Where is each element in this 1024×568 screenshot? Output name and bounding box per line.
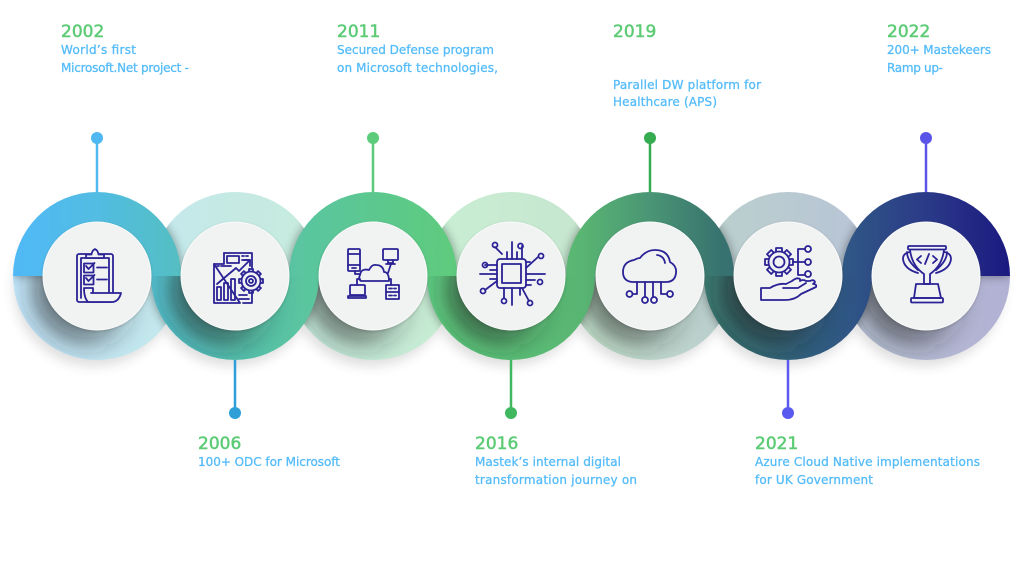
text: 2011: on Microsoft technologies, <box>337 61 498 75</box>
disc shadows on dark lower rings <box>154 276 832 360</box>
text: 2021 <box>755 434 980 487</box>
text: 2016: transformation journey on <box>475 473 637 487</box>
disc shadows on light lower rings <box>15 276 975 360</box>
text: 2002: Microsoft.Net project - <box>61 61 189 75</box>
icon: clipboard checklist <box>77 249 121 302</box>
icon: cloud with nodes <box>623 250 676 303</box>
connector: 2021 <box>782 360 794 419</box>
text: 2011 <box>337 22 498 75</box>
text: 2022 <box>887 22 991 75</box>
connector: 2022 <box>920 132 932 192</box>
icon: hand holding gear <box>761 246 816 300</box>
text: 2006 <box>198 434 340 469</box>
text: 2002: 2002 <box>61 22 104 42</box>
connector: 2002 <box>91 132 103 192</box>
text: 2021: for UK Government <box>755 473 873 487</box>
text: 2002: World’s first <box>61 43 136 57</box>
connector: 2016 <box>505 360 517 419</box>
text: 2016: 2016 <box>475 434 518 454</box>
text: 2019: Healthcare (APS) <box>613 95 717 109</box>
connector: 2006 <box>229 360 241 419</box>
text: 2006: 100+ ODC for Microsoft <box>198 455 340 469</box>
icon: code trophy <box>903 246 951 302</box>
serpentine dark half rings <box>13 192 1010 360</box>
text: 2019: 2019 <box>613 22 656 42</box>
text: 2022: 2022 <box>887 22 930 42</box>
text: 2002 <box>61 22 189 75</box>
connector: 2011 <box>367 132 379 192</box>
text: 2019: Parallel DW platform for <box>613 78 761 92</box>
text: 2016 <box>475 434 637 487</box>
shadows cast by dark rings onto light rings <box>13 223 1010 329</box>
text: 2016: Mastek’s internal digital <box>475 455 621 469</box>
white base under rings <box>13 192 1010 360</box>
connector: 2019 <box>644 132 656 192</box>
text: 2021: 2021 <box>755 434 798 454</box>
text: 2022: 200+ Mastekeers <box>887 43 991 57</box>
text: 2011: Secured Defense program <box>337 43 494 57</box>
text: 2019 <box>613 22 761 109</box>
icon: cloud network <box>348 249 399 299</box>
inner disc rims <box>43 223 980 331</box>
text: 2006: 2006 <box>198 434 241 454</box>
inner white discs <box>43 222 980 330</box>
text: 2011: 2011 <box>337 22 380 42</box>
icon: microchip <box>480 242 545 306</box>
ground shadow under circles <box>14 210 1003 366</box>
icon: report with gear <box>214 253 263 303</box>
text: 2021: Azure Cloud Native implementations <box>755 455 980 469</box>
text: 2022: Ramp up- <box>887 61 943 75</box>
light half rings <box>13 192 1010 360</box>
